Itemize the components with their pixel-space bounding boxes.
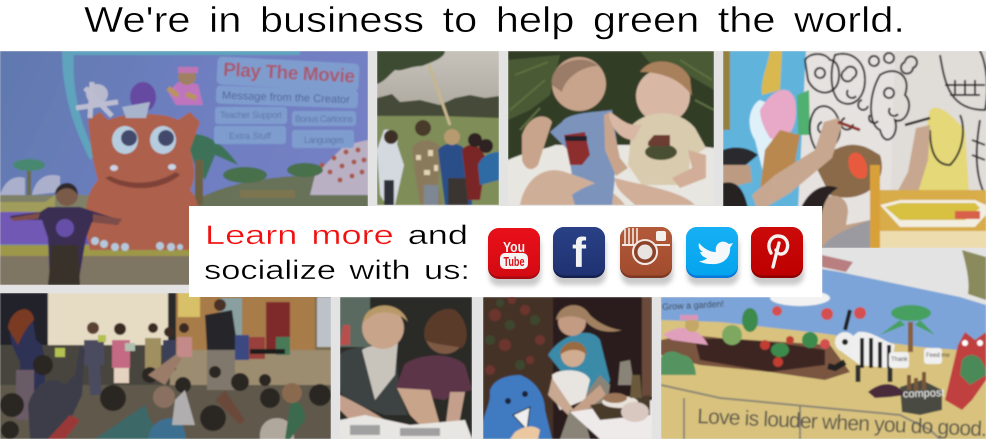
photo: child in front of projected movie menu: Message from the Creator: [222, 90, 350, 106]
photo: garden mural on a school wall: Thank: [891, 357, 909, 363]
icon: YouTube: You: [503, 239, 525, 256]
title: We're in business to help green the world.: [84, 0, 905, 40]
icon: YouTube: [488, 228, 541, 286]
photo: volunteers painting a mural: [723, 51, 986, 248]
photo: garden mural on a school wall: compost: [903, 387, 945, 401]
photo: children planting a tree: [377, 51, 499, 205]
photo: kids at a bake sale table: [483, 296, 652, 439]
photo: garden mural on a school wall: [661, 250, 986, 439]
icon: Facebook: [553, 227, 606, 285]
photo: garden mural on a school wall: Feed me: [926, 353, 950, 359]
icon: Pinterest: [751, 227, 804, 285]
photo: child in front of projected movie menu: Play The Movie: [223, 60, 355, 87]
photo: assembly with raised hands: [0, 293, 331, 439]
photo: child in front of projected movie menu: Extra Stuff: [229, 131, 271, 141]
photo: two boys colouring: [340, 297, 472, 439]
panel: learn more and social links: [189, 206, 822, 297]
photo: child in front of projected movie menu: [0, 51, 368, 285]
photo: garden mural on a school wall: Grow a garden!: [662, 299, 724, 312]
photo: two babies in t-shirts: [508, 51, 714, 205]
photo: child in front of projected movie menu: Teacher Support: [220, 110, 282, 120]
icon: Twitter: [686, 227, 739, 285]
photo: child in front of projected movie menu: Bonus Cartoons: [295, 114, 354, 124]
panel heading: learn more: Learn more and: [205, 220, 468, 250]
icon: Facebook: f: [572, 229, 587, 276]
icon: YouTube: Tube: [504, 254, 524, 269]
panel heading: socialize: socialize with us:: [204, 255, 470, 285]
photo: child in front of projected movie menu: Languages: [304, 135, 344, 145]
icon: Instagram: [620, 227, 673, 285]
